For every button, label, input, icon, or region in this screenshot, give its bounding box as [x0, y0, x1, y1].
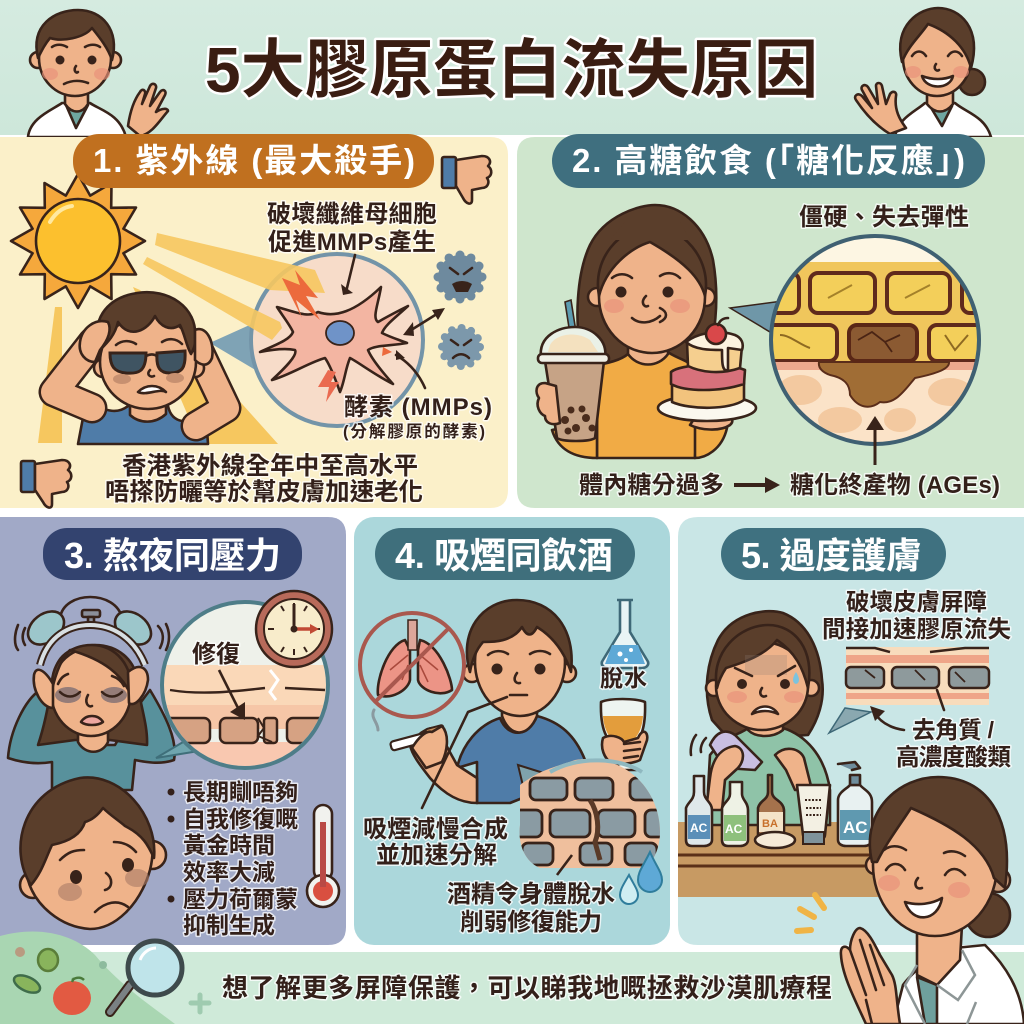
text: enzyme note: 酵素 (MMPs)	[344, 394, 492, 421]
bullet list: 黃金時間	[183, 832, 275, 858]
magnified dry skin wall	[510, 759, 670, 875]
icon: flask	[602, 600, 648, 668]
arrow: sugar to AGEs	[734, 477, 780, 493]
icon: thermometer	[307, 805, 339, 907]
heading pill 3: 3. 熬夜同壓力	[64, 535, 281, 576]
title: 5大膠原蛋白流失原因	[205, 34, 818, 106]
skincare bottles	[686, 762, 872, 848]
text: stiffness: 僵硬、失去彈性	[799, 204, 969, 231]
text: fibroblast note	[267, 201, 437, 256]
text: smoking effect	[363, 816, 508, 869]
bullet list: 自我修復嘅	[183, 806, 298, 832]
text: alcohol effect: 酒精令身體脫水	[447, 880, 615, 908]
icon: thumbs down top	[442, 156, 491, 204]
icon: magnifying glass	[110, 941, 182, 1012]
skincare bottles: BA	[762, 818, 778, 830]
heading pill 2	[552, 134, 985, 188]
text: smoking effect: 並加速分解	[376, 842, 497, 869]
doctor: top left	[28, 10, 168, 137]
cake on plate	[658, 318, 756, 421]
bullet list: 壓力荷爾蒙	[183, 886, 298, 912]
text: UV summary: 唔搽防曬等於幫皮膚加速老化	[105, 478, 423, 506]
heading pill 4: 4. 吸煙同飲酒	[395, 535, 613, 576]
decorative plus	[191, 995, 209, 1012]
panel 2: high sugar diet	[517, 134, 1024, 508]
text: repair: 修復	[192, 641, 240, 668]
icon: praying hands	[841, 928, 900, 1024]
call to action text: 想了解更多屏障保護，可以睇我地嘅拯救沙漠肌療程	[222, 973, 832, 1003]
panel 1: UV	[0, 134, 508, 508]
heading pill 4	[375, 528, 635, 580]
text: excess sugar: 體內糖分過多	[579, 472, 724, 499]
text: AGEs: 糖化終產物 (AGEs)	[790, 471, 1000, 499]
skincare bottles: AC	[690, 821, 708, 835]
text: exfoliants and acids: 高濃度酸類	[896, 744, 1012, 770]
character: girl with bubble tea and cake	[537, 205, 756, 458]
footer blob with food icons	[0, 931, 175, 1024]
sun rays	[38, 287, 278, 444]
heading pill 1: 1. 紫外線 (最大殺手)	[93, 142, 415, 179]
icon: angry enzyme small	[442, 328, 480, 366]
text: alcohol effect: 削弱修復能力	[460, 909, 602, 936]
callout pointer and arrows	[829, 690, 944, 733]
bullet list	[168, 779, 298, 938]
text: alcohol effect	[447, 880, 615, 936]
bubble tea	[537, 300, 609, 441]
icon: wine glass and hand	[601, 699, 647, 770]
skincare bottles: AC	[843, 818, 868, 837]
magnified skin callout: AGEs	[730, 235, 1002, 465]
heading pill 1	[73, 134, 434, 188]
magnified fibroblast callout	[143, 233, 445, 426]
character: worried boy	[20, 777, 166, 929]
panel 3: late nights and stress	[0, 517, 346, 945]
doctor: top right	[855, 8, 991, 137]
text: barrier damage: 破壞皮膚屏障	[846, 589, 987, 615]
text: dehydration: 脫水	[600, 665, 647, 691]
panel 5: over-treating skin	[678, 517, 1024, 945]
icon: water drops	[620, 852, 662, 904]
text: exfoliants and acids: 去角質 /	[912, 717, 994, 743]
text: fibroblast note: 促進MMPs產生	[268, 228, 436, 256]
heading pill 3	[43, 528, 302, 580]
bullet list: 長期瞓唔夠	[183, 779, 298, 805]
text: UV summary: 香港紫外線全年中至高水平	[122, 452, 418, 480]
text: barrier damage: 間接加速膠原流失	[822, 616, 1012, 642]
character: man with sunglasses	[54, 292, 226, 444]
heading pill 2: 2. 高糖飲食 (「糖化反應」)	[572, 142, 965, 179]
header band	[0, 0, 1024, 135]
damaged skin patch	[846, 647, 989, 705]
bullet list: 效率大減	[183, 859, 275, 885]
text: barrier damage	[822, 589, 1012, 642]
text: enzyme note: (分解膠原的酵素)	[343, 422, 485, 441]
panel 4: smoking and drinking	[354, 517, 670, 945]
text: smoking effect: 吸煙減慢合成	[363, 816, 508, 843]
heading pill 5: 5. 過度護膚	[741, 535, 922, 576]
icon: angry enzyme large	[438, 255, 482, 299]
character: frustrated woman	[691, 611, 830, 825]
text: enzyme note	[343, 394, 492, 441]
footer banner	[0, 931, 1024, 1024]
text: exfoliants and acids	[896, 717, 1012, 770]
character: big smiling doctor	[866, 777, 1024, 1024]
icon: sun	[11, 174, 145, 308]
character: smoking boy	[373, 600, 585, 808]
icon: thumbs down bottom	[21, 460, 71, 508]
character: tired woman with alarm clock	[8, 597, 175, 790]
text: UV summary	[105, 452, 423, 506]
decorative sparks	[797, 895, 824, 931]
icon: no lungs sign	[360, 613, 464, 717]
bullet list: 抑制生成	[183, 912, 275, 938]
skincare bottles: AC	[725, 822, 743, 836]
heading pill 5	[721, 528, 946, 580]
icon: wall clock	[256, 591, 332, 667]
magnified skin callout: repair	[155, 602, 342, 772]
text: fibroblast note: 破壞纖維母細胞	[267, 201, 437, 228]
table	[678, 822, 878, 897]
